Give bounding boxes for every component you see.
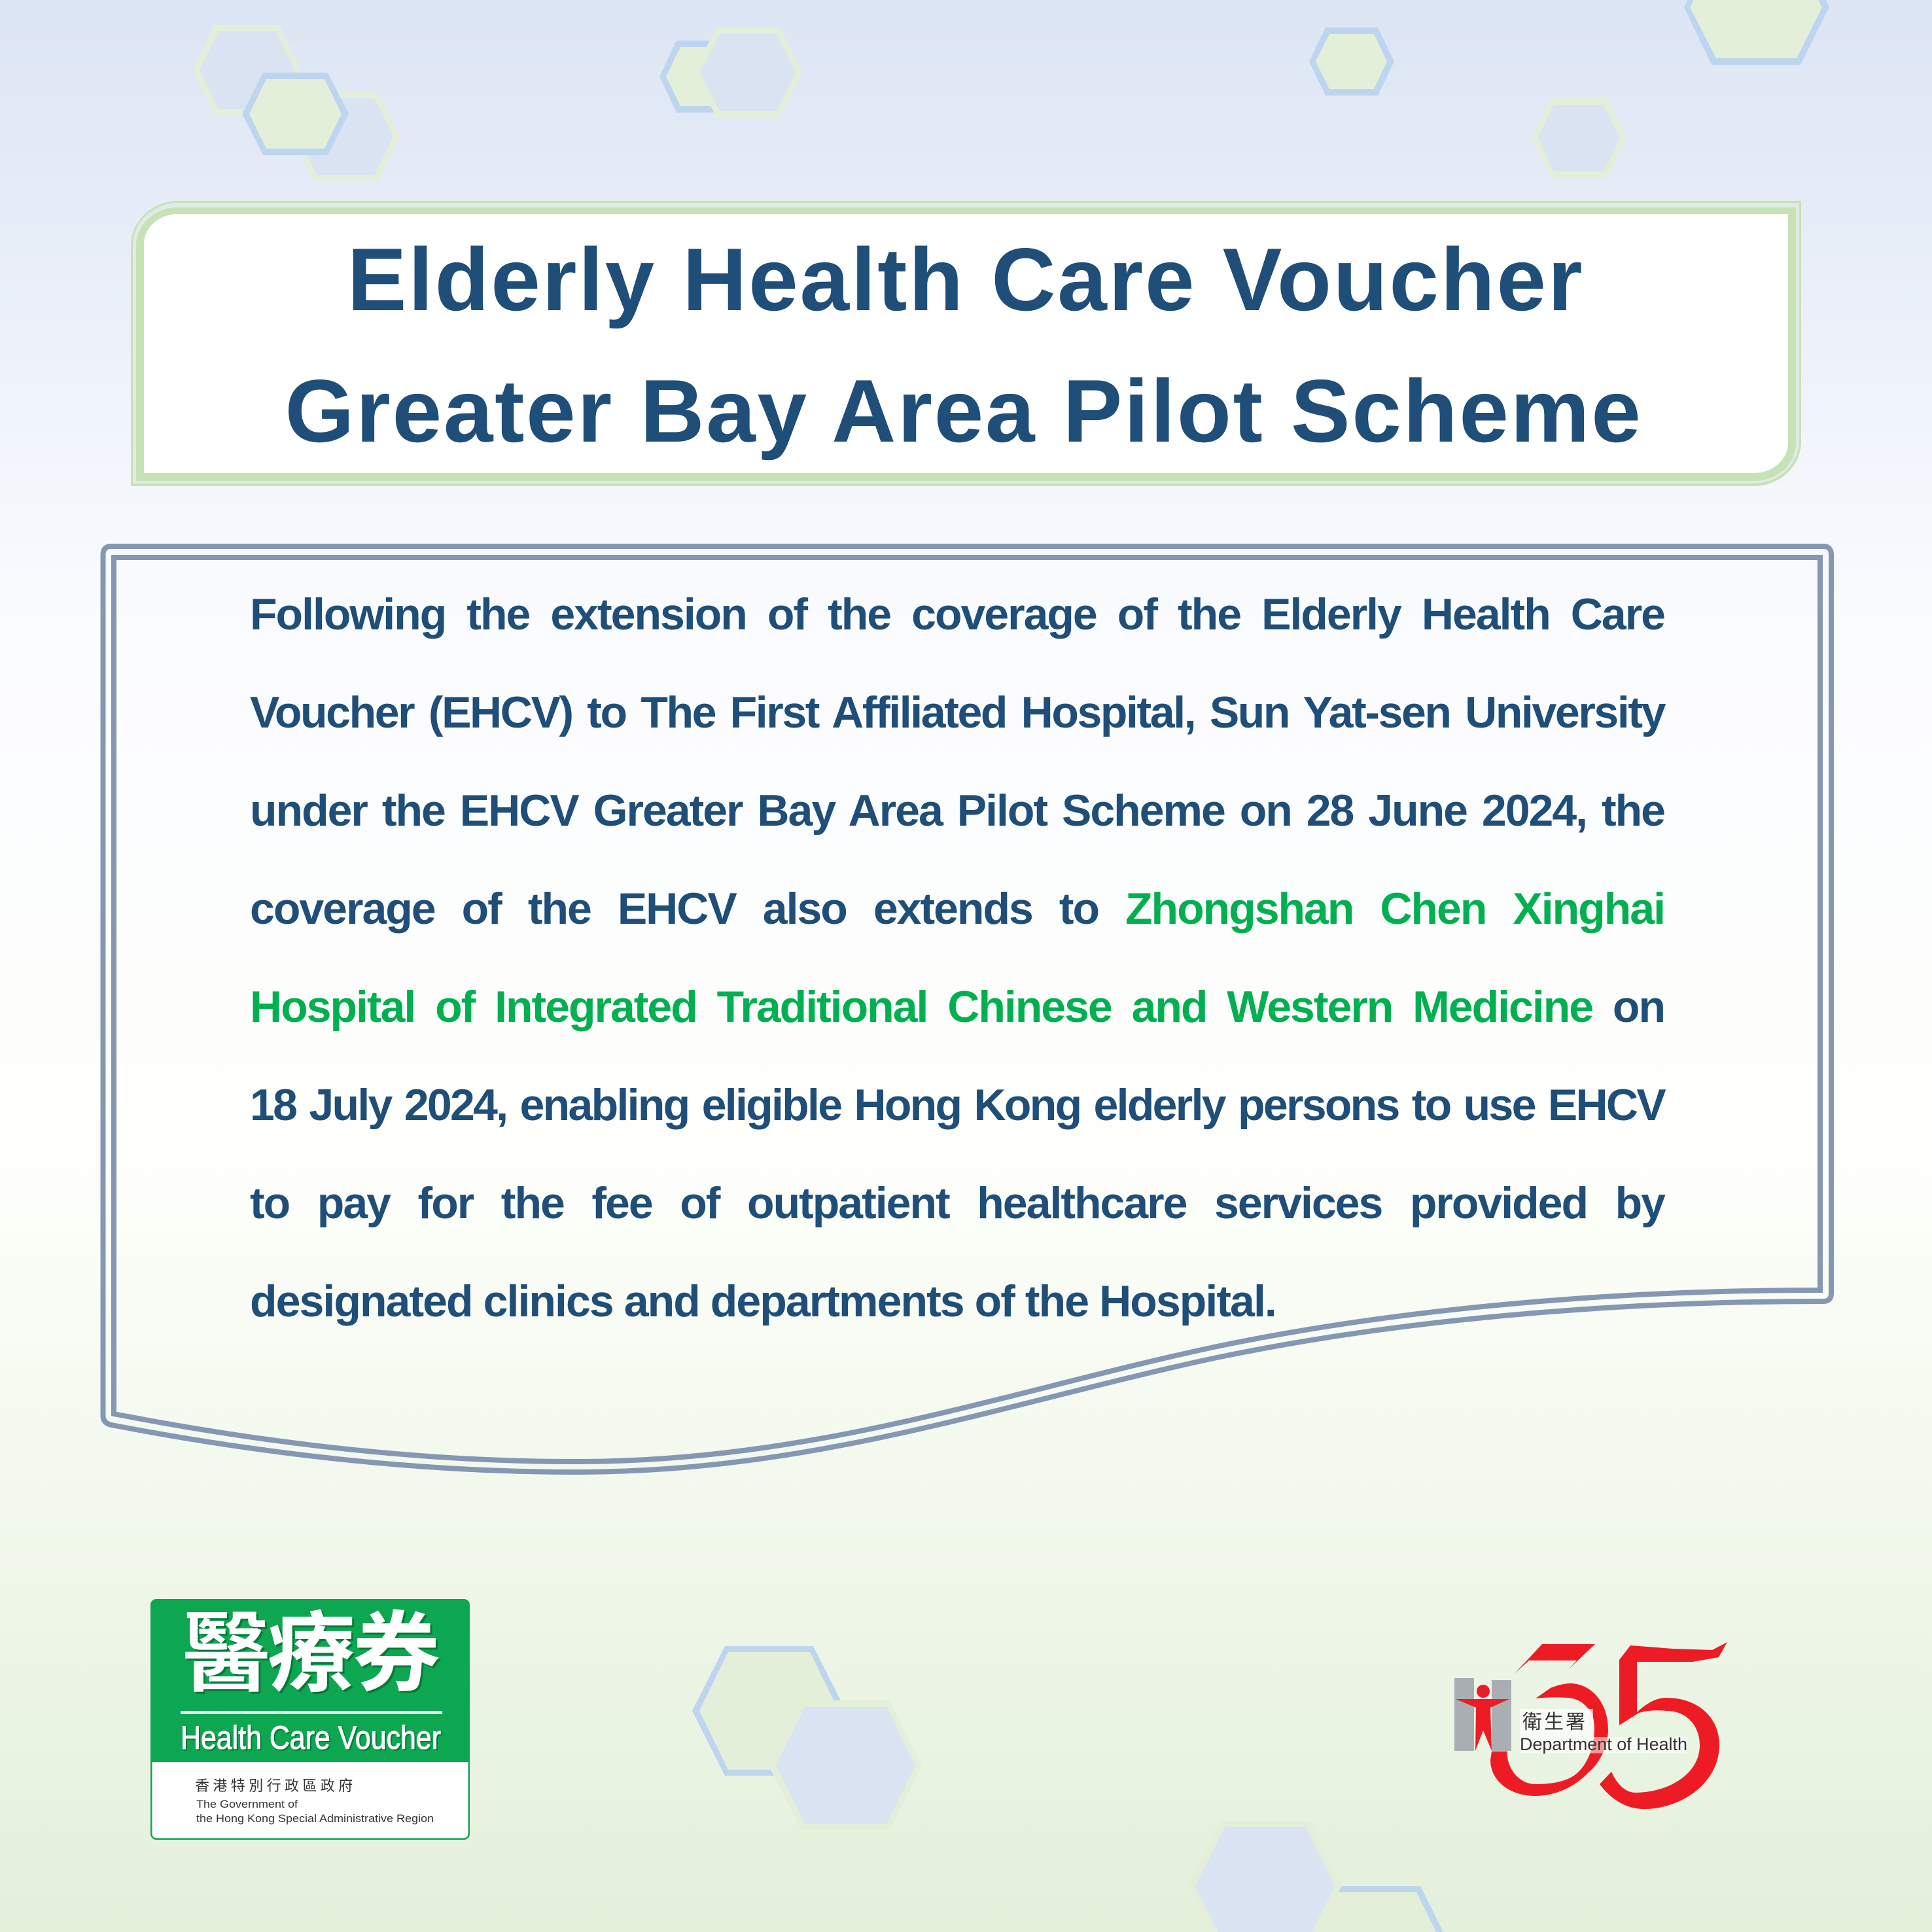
title: Elderly Health Care Voucher	[347, 230, 1584, 329]
logo: Department of Health 135: Department of Health	[1520, 1734, 1687, 1754]
hexagon cluster: bottom centre	[692, 1646, 922, 1830]
title: Greater Bay Area Pilot Scheme	[285, 361, 1642, 461]
logo: Health Care Voucher: 醫療券	[184, 1585, 441, 1712]
hexagon: top right small	[1309, 27, 1394, 96]
logo: Health Care Voucher: 香港特別行政區政府	[195, 1774, 357, 1795]
hexagon cluster: top centre	[659, 27, 802, 117]
logo: Department of Health 135: 衛生署	[1522, 1706, 1587, 1734]
logo: Health Care Voucher: Health Care Voucher	[182, 1721, 442, 1757]
body text block: coverage of the EHCV also extends to Zhongshan Chen Xinghai	[250, 884, 1664, 934]
body text block	[250, 589, 1666, 1326]
body text block: to pay for the fee of outpatient healthcare services provided by	[250, 1178, 1664, 1228]
hexagon: right of top band	[1532, 98, 1626, 178]
logo: Health Care Voucher: 醫療券	[183, 1583, 439, 1710]
logo: Health Care Voucher: the Hong Kong Special Administrative Region	[196, 1812, 434, 1825]
body text block: Hospital of Integrated Traditional Chinese and Western Medicine on	[250, 982, 1664, 1032]
logo: Health Care Voucher: The Government of	[196, 1798, 298, 1810]
title	[285, 230, 1642, 461]
body text block: under the EHCV Greater Bay Area Pilot Scheme on 28 June 2024, the	[250, 786, 1664, 835]
body text block: designated clinics and departments of the Hospital.	[250, 1276, 1276, 1326]
body text block: Voucher (EHCV) to The First Affiliated Hospital, Sun Yat-sen University	[250, 688, 1664, 737]
body text block: 18 July 2024, enabling eligible Hong Kong elderly persons to use EHCV	[250, 1080, 1664, 1130]
hexagon cluster: top left	[193, 25, 400, 182]
hexagon: top right cut off	[1684, 0, 1829, 65]
body text block: Following the extension of the coverage of the Elderly Health Care	[250, 589, 1664, 639]
logo: Health Care Voucher: Health Care Voucher	[181, 1719, 441, 1756]
hexagon cluster: bottom right	[1189, 1821, 1453, 1932]
